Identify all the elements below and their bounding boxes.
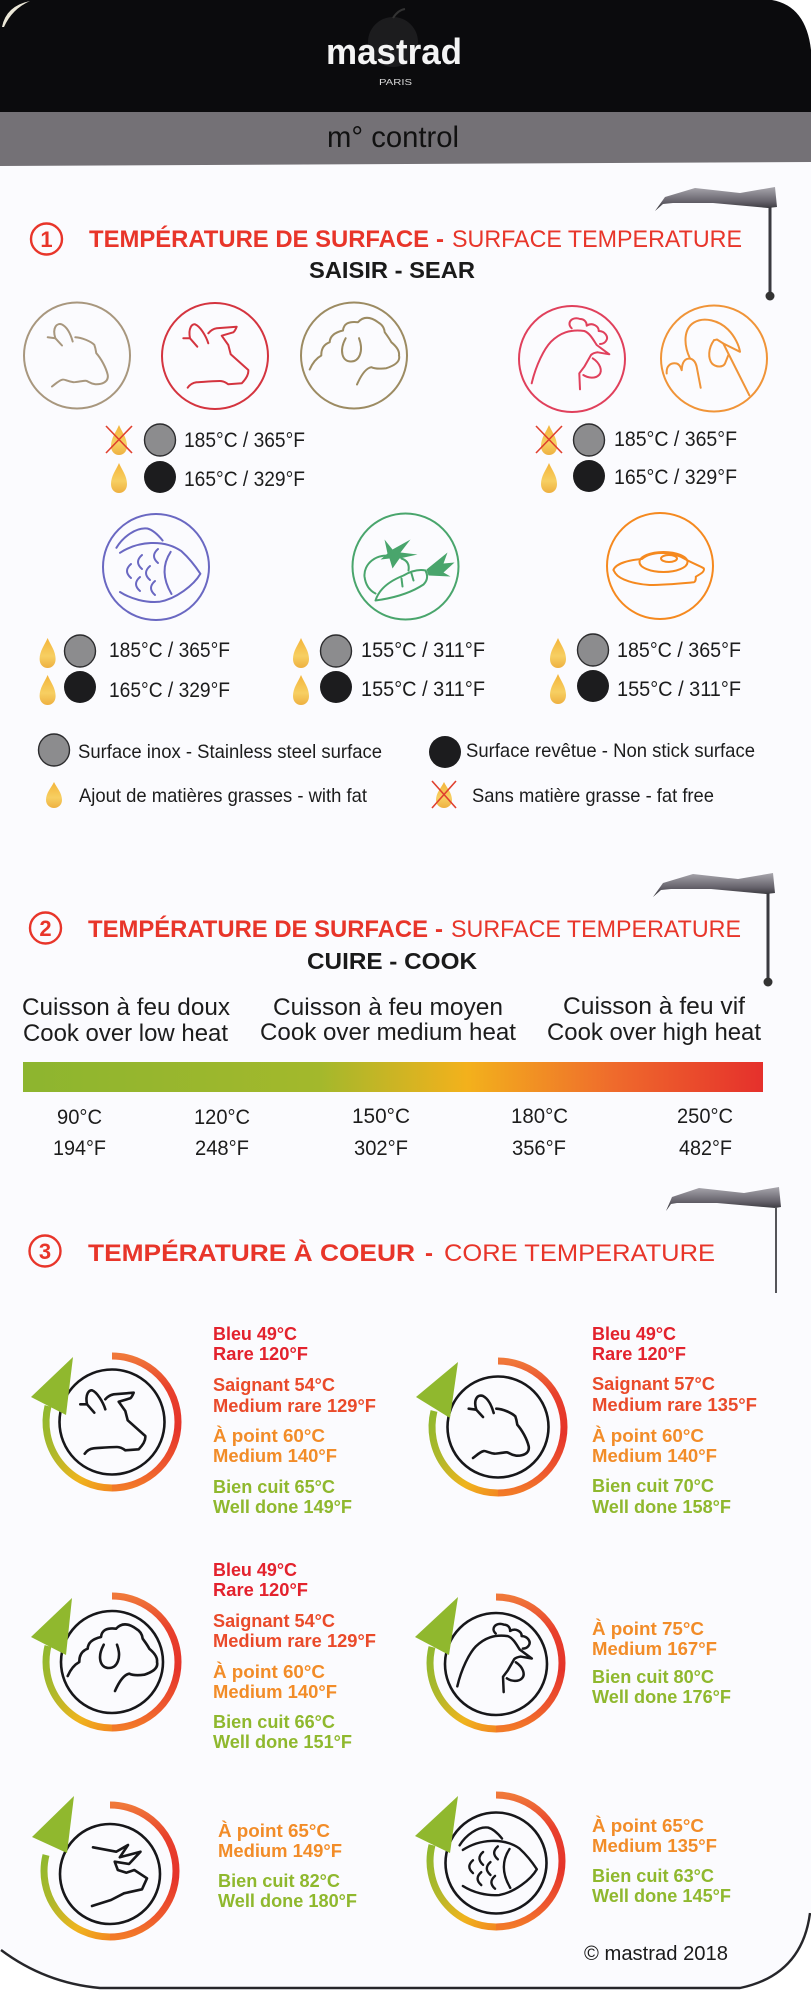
ring: sheep (31, 1596, 178, 1728)
icon: with fat (293, 638, 309, 668)
ring: lamb (416, 1361, 564, 1493)
medium French: À point 60°C (213, 1425, 325, 1446)
rare French: Bleu 49°C (213, 1560, 297, 1580)
icon: thermometer probe 2 (653, 873, 775, 986)
icon: with fat (293, 675, 309, 705)
icon: mushroom (661, 306, 767, 412)
number badge 1 (31, 224, 62, 254)
icon: with fat (46, 782, 62, 808)
well done French: Bien cuit 63°C (592, 1866, 714, 1886)
icon: thermometer probe 1 (655, 187, 777, 300)
non stick temperature: 165°C / 329°F (614, 465, 737, 489)
well done English: Well done 145°F (592, 1886, 731, 1906)
icon: beef (162, 303, 268, 409)
rare English: Rare 120°F (592, 1344, 686, 1364)
medium English: Medium 140°F (592, 1446, 717, 1466)
well done English: Well done 158°F (592, 1497, 731, 1517)
steel temperature: 185°C / 365°F (614, 427, 737, 451)
icon: logo emblem (368, 9, 418, 67)
icon: steel disc (578, 634, 608, 666)
248 F: 248°F (195, 1136, 249, 1160)
legend fat free: Sans matière grasse - fat free (472, 785, 714, 807)
ring: beef (31, 1356, 178, 1488)
rare French: Bleu 49°C (213, 1324, 297, 1344)
icon: non stick disc (144, 461, 176, 493)
482 F: 482°F (679, 1136, 732, 1160)
heat gradient bar (23, 1062, 763, 1092)
icon: steel disc (574, 424, 604, 456)
number badge 1: 1 (40, 227, 53, 252)
90 C: 90°C (57, 1105, 102, 1129)
lamb doneness text (592, 1324, 757, 1517)
icon: fried egg (607, 513, 713, 619)
subtitle: SAISIR - SEAR (309, 257, 475, 283)
logo wordmark: mastrad (326, 31, 462, 72)
number badge 2: 2 (39, 916, 52, 941)
title French: TEMPÉRATURE DE SURFACE (88, 915, 428, 943)
icon: chicken (519, 306, 625, 412)
well done French: Bien cuit 65°C (213, 1477, 335, 1497)
steel temperature: 185°C / 365°F (617, 638, 741, 662)
title French: TEMPÉRATURE DE SURFACE (89, 225, 429, 253)
non stick temperature: 155°C / 311°F (617, 677, 741, 701)
medium rare English: Medium rare 129°F (213, 1396, 376, 1416)
section 2 heading (30, 912, 741, 974)
icon: vegetables (352, 514, 458, 620)
copyright: © mastrad 2018 (584, 1943, 728, 1965)
number badge 3: 3 (39, 1239, 51, 1264)
medium rare French: Saignant 54°C (213, 1375, 335, 1395)
well done French: Bien cuit 82°C (218, 1871, 340, 1891)
180 C: 180°C (511, 1104, 568, 1128)
well done English: Well done 151°F (213, 1732, 352, 1752)
icon: non stick disc (429, 736, 461, 768)
302 F: 302°F (354, 1136, 408, 1160)
ring: fish (415, 1795, 562, 1927)
vegetable temperatures (293, 635, 485, 705)
product name: m° control (327, 121, 459, 154)
sheep doneness text (213, 1560, 376, 1752)
rare English: Rare 120°F (213, 1344, 308, 1364)
icon: with fat (550, 638, 566, 668)
seared non stick temperature: 165°C / 329°F (184, 467, 305, 491)
icon: fat free (536, 425, 562, 455)
card bottom edge (1, 1913, 810, 1988)
ring: pork (32, 1796, 176, 1937)
high heat English: Cook over high heat (547, 1019, 761, 1046)
section 3 heading (30, 1236, 715, 1267)
title dash: - (425, 1240, 433, 1267)
chicken doneness text (592, 1618, 731, 1707)
well done English: Well done 176°F (592, 1687, 731, 1707)
steel temperature: 155°C / 311°F (361, 638, 485, 662)
medium English: Medium 140°F (213, 1682, 337, 1702)
grey product band (0, 112, 811, 166)
medium French: À point 65°C (218, 1820, 330, 1841)
non stick temperature: 165°C / 329°F (109, 678, 230, 702)
medium French: À point 75°C (592, 1618, 704, 1639)
pork doneness text (218, 1820, 357, 1911)
title English: SURFACE TEMPERATURE (452, 226, 742, 253)
icon: fish (103, 514, 209, 620)
icon: with fat (550, 674, 566, 704)
title English: CORE TEMPERATURE (444, 1240, 715, 1267)
icon: thermometer probe 3 (666, 1187, 781, 1293)
icon: non stick disc (577, 670, 609, 702)
medium French: À point 60°C (213, 1661, 325, 1682)
medium English: Medium 149°F (218, 1841, 342, 1861)
194 F: 194°F (53, 1136, 106, 1160)
icon: sheep (301, 302, 407, 408)
number badge 2 (30, 912, 61, 944)
medium rare English: Medium rare 135°F (592, 1395, 757, 1415)
high heat French: Cuisson à feu vif (563, 993, 745, 1020)
number badge 3 (30, 1236, 60, 1266)
legend (38, 734, 755, 808)
icon: steel disc (320, 635, 352, 667)
150 C: 150°C (352, 1104, 410, 1128)
medium heat French: Cuisson à feu moyen (273, 994, 503, 1021)
medium rare French: Saignant 54°C (213, 1611, 335, 1631)
medium rare English: Medium rare 129°F (213, 1631, 376, 1651)
legend with fat: Ajout de matières grasses - with fat (79, 785, 368, 807)
poultry temperatures (536, 424, 737, 493)
non stick temperature: 155°C / 311°F (361, 677, 485, 701)
well done French: Bien cuit 66°C (213, 1712, 335, 1732)
medium French: À point 60°C (592, 1425, 704, 1446)
icon: non stick disc (573, 460, 605, 492)
header (0, 0, 811, 166)
seared steel temperature: 185°C / 365°F (184, 428, 305, 452)
well done French: Bien cuit 80°C (592, 1667, 714, 1687)
fish temperatures (40, 635, 230, 705)
title dash: - (436, 226, 444, 253)
icon: fat free (106, 425, 132, 455)
subtitle: CUIRE - COOK (307, 948, 477, 974)
medium English: Medium 140°F (213, 1446, 337, 1466)
icon: non stick disc (64, 671, 96, 703)
icon: with fat (40, 675, 56, 705)
icon: with fat (111, 463, 127, 493)
beef doneness text (213, 1324, 376, 1517)
legend stainless steel: Surface inox - Stainless steel surface (78, 741, 382, 763)
rare English: Rare 120°F (213, 1580, 308, 1600)
meat temperatures (106, 424, 305, 493)
title French: TEMPÉRATURE À COEUR (88, 1239, 415, 1267)
egg temperatures (550, 634, 741, 704)
ring: chicken (415, 1597, 562, 1729)
rare French: Bleu 49°C (592, 1324, 676, 1344)
logo subline: PARIS (379, 78, 412, 87)
icon: with fat (40, 638, 56, 668)
temperature scale (53, 1104, 733, 1160)
well done English: Well done 180°F (218, 1891, 357, 1911)
title English: SURFACE TEMPERATURE (451, 916, 741, 943)
well done English: Well done 149°F (213, 1497, 352, 1517)
corner highlight (2, 1, 30, 27)
low heat English: Cook over low heat (23, 1020, 228, 1047)
icon: non stick disc (320, 671, 352, 703)
356 F: 356°F (512, 1136, 566, 1160)
heat level labels (22, 993, 761, 1047)
medium English: Medium 167°F (592, 1639, 717, 1659)
medium rare French: Saignant 57°C (592, 1374, 715, 1394)
medium French: À point 65°C (592, 1815, 704, 1836)
icon: steel disc (144, 424, 176, 456)
well done French: Bien cuit 70°C (592, 1476, 714, 1496)
medium English: Medium 135°F (592, 1836, 717, 1856)
legend non stick: Surface revêtue - Non stick surface (466, 740, 755, 762)
section 1 heading (31, 224, 742, 283)
medium heat English: Cook over medium heat (260, 1019, 516, 1046)
250 C: 250°C (677, 1104, 733, 1128)
title dash: - (435, 916, 443, 943)
icon: lamb (24, 302, 130, 408)
steel temperature: 185°C / 365°F (109, 638, 230, 662)
low heat French: Cuisson à feu doux (22, 994, 230, 1021)
icon: fat free (432, 781, 456, 808)
120 C: 120°C (194, 1105, 250, 1129)
fish doneness text (592, 1815, 731, 1906)
icon: steel disc (64, 635, 96, 667)
icon: steel disc (38, 734, 70, 766)
icon: with fat (541, 463, 557, 493)
black header band (0, 0, 811, 112)
